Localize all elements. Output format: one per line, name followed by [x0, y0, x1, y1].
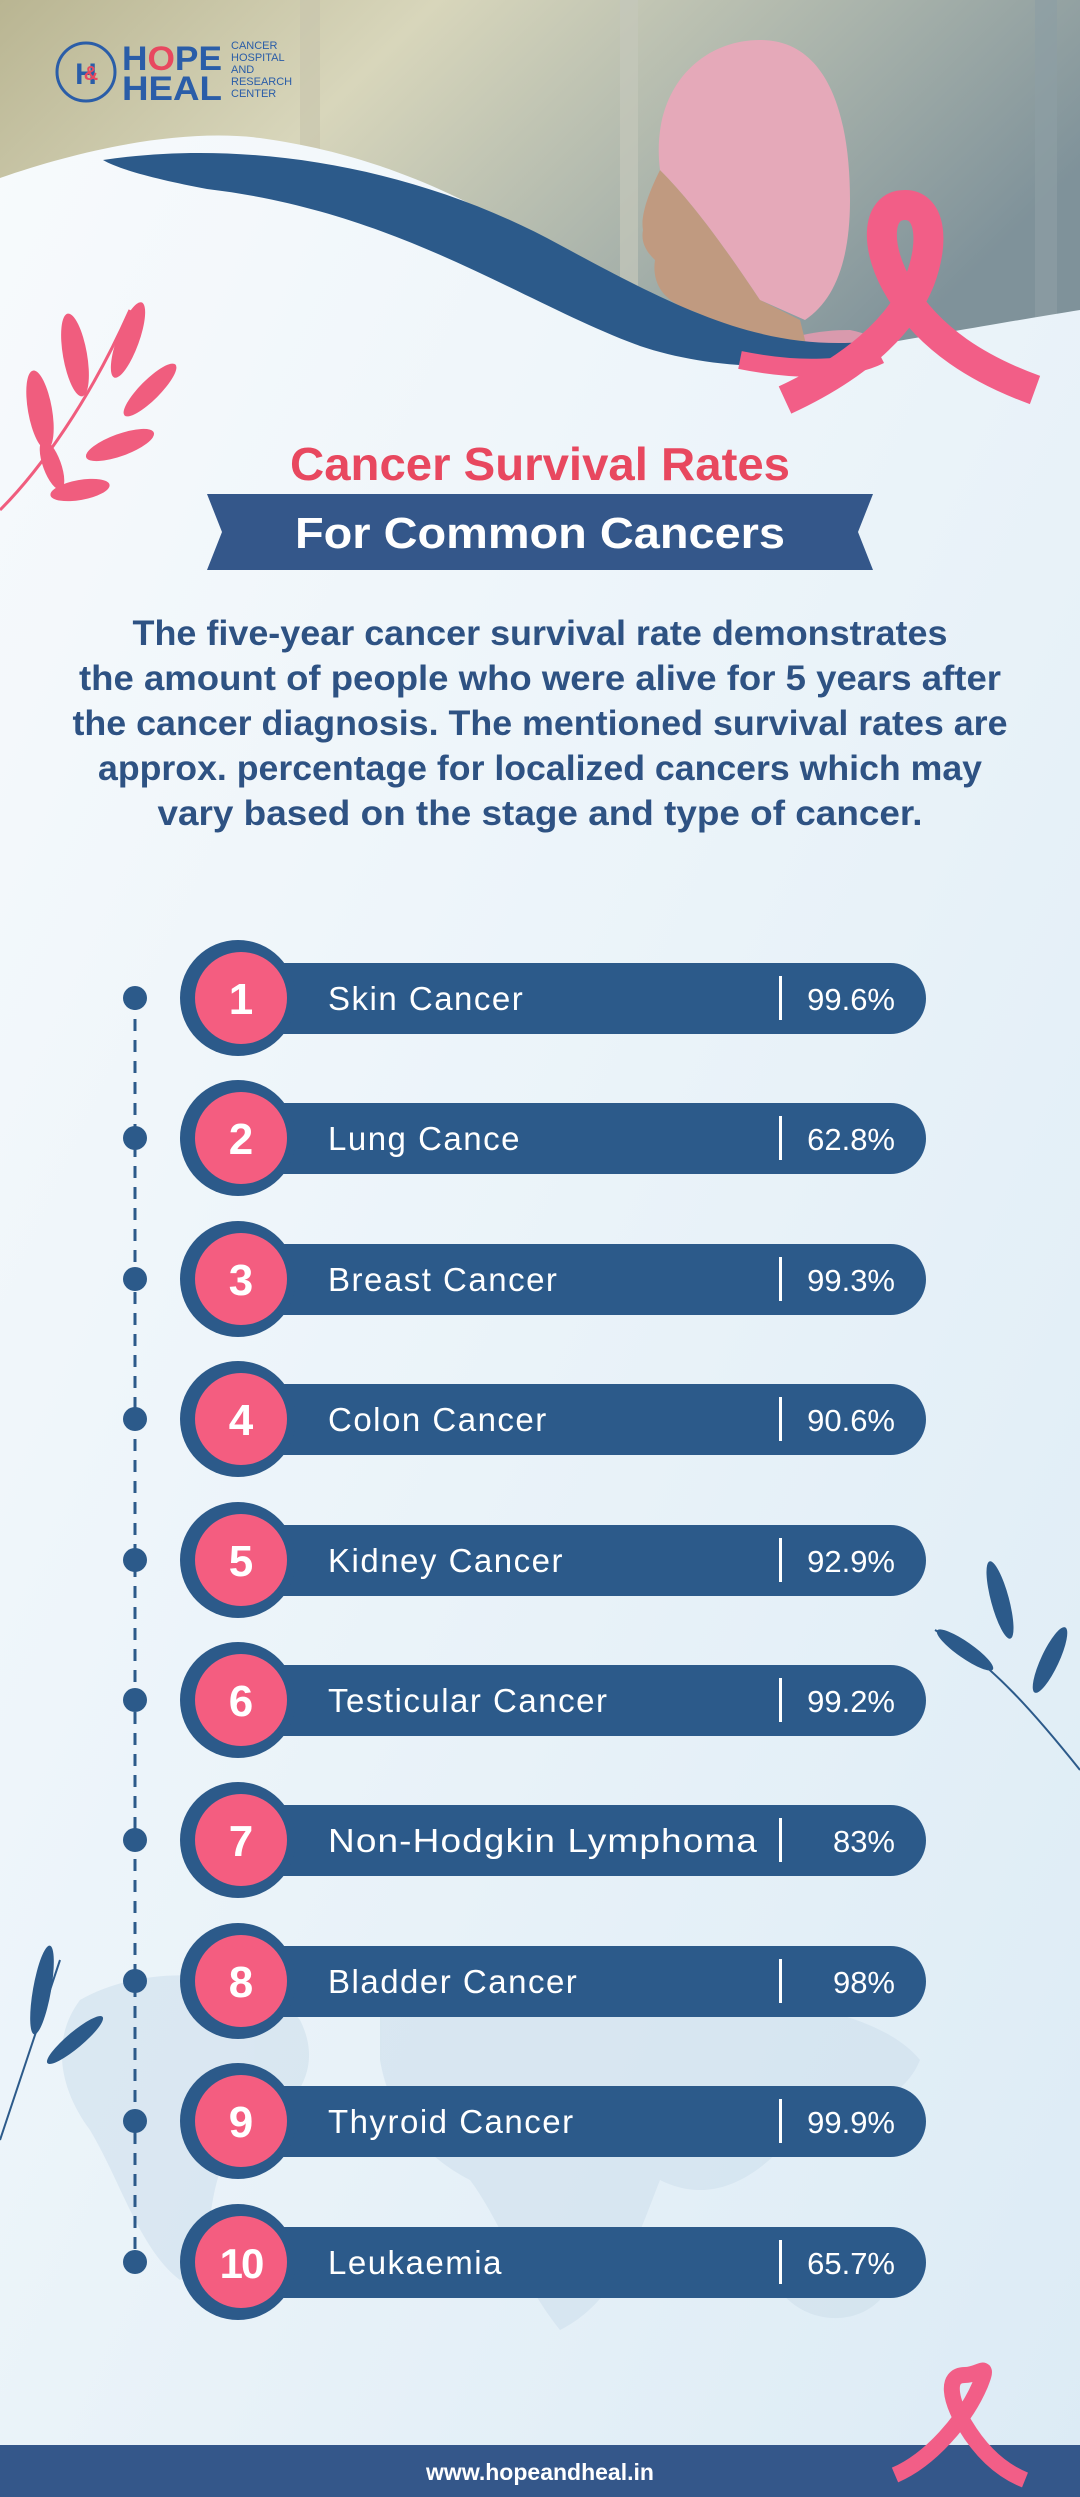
intro paragraph: the cancer diagnosis. The mentioned survival rates are	[72, 704, 1008, 743]
row 9: 9	[229, 2098, 253, 2147]
title banner	[207, 494, 873, 570]
row 3: 99.3%	[807, 1263, 895, 1298]
logo: CENTER	[231, 88, 276, 100]
row 2	[123, 1080, 926, 1196]
icon: blue leaves left	[0, 1944, 108, 2140]
logo: RESEARCH	[231, 76, 292, 88]
woman figure	[642, 40, 940, 420]
logo: HOSPITAL	[231, 52, 285, 64]
intro paragraph: the amount of people who were alive for 5 years after	[79, 659, 1001, 698]
icon: pink ribbon bottom	[895, 2371, 1025, 2480]
row 8: 98%	[833, 1965, 895, 2000]
row 8	[123, 1923, 926, 2039]
row 4: Colon Cancer	[328, 1401, 548, 1438]
blue wave band	[103, 153, 865, 366]
row 1: 99.6%	[807, 982, 895, 1017]
row 4: 90.6%	[807, 1403, 895, 1438]
row 1: 1	[229, 975, 253, 1024]
row 7: 83%	[833, 1824, 895, 1859]
row 6	[123, 1642, 926, 1758]
row 2: 62.8%	[807, 1122, 895, 1157]
intro paragraph: vary based on the stage and type of cancer.	[158, 794, 922, 833]
title: Cancer Survival Rates	[290, 438, 790, 490]
row 1: Skin Cancer	[328, 980, 524, 1017]
row 3: Breast Cancer	[328, 1261, 558, 1298]
intro paragraph: The five-year cancer survival rate demonstrates	[132, 614, 947, 653]
logo: CANCER	[231, 40, 278, 52]
logo: HOPE	[122, 40, 222, 78]
row 5	[123, 1502, 926, 1618]
header photo	[0, 0, 1080, 420]
row 4	[123, 1361, 926, 1477]
row 2: 2	[229, 1115, 253, 1164]
logo: AND	[231, 64, 254, 76]
icon: pink ribbon top	[740, 205, 1035, 400]
row 5: 92.9%	[807, 1544, 895, 1579]
logo: HEAL	[122, 70, 222, 108]
icon: pink leaf branch top-left	[0, 299, 183, 510]
row 4: 4	[229, 1396, 254, 1445]
logo: &	[84, 63, 98, 85]
footer bar	[0, 2445, 1080, 2497]
icon: blue leaves right	[933, 1559, 1080, 1770]
world map faint	[62, 1975, 920, 2330]
intro paragraph	[72, 614, 1008, 833]
row 3	[123, 1221, 926, 1337]
row 10	[123, 2204, 926, 2320]
row 7: Non-Hodgkin Lymphoma	[328, 1822, 758, 1859]
row 6: 6	[229, 1677, 253, 1726]
row 2: Lung Cance	[328, 1120, 521, 1157]
row 8: Bladder Cancer	[328, 1963, 578, 2000]
row 3: 3	[229, 1256, 253, 1305]
title banner: For Common Cancers	[295, 509, 785, 558]
row 6: 99.2%	[807, 1684, 895, 1719]
row 6: Testicular Cancer	[328, 1682, 608, 1719]
row 5: Kidney Cancer	[328, 1542, 564, 1579]
row 7	[123, 1782, 926, 1898]
row 7: 7	[229, 1817, 253, 1866]
logo: H	[75, 58, 97, 91]
row 10: Leukaemia	[328, 2244, 503, 2281]
row 5: 5	[229, 1537, 253, 1586]
row 1	[123, 940, 926, 1056]
logo	[57, 40, 292, 108]
row 10: 10	[220, 2240, 263, 2287]
row 9: Thyroid Cancer	[328, 2103, 575, 2140]
intro paragraph: approx. percentage for localized cancers which may	[98, 749, 983, 788]
footer bar: www.hopeandheal.in	[425, 2459, 654, 2485]
row 10: 65.7%	[807, 2246, 895, 2281]
row 8: 8	[229, 1958, 253, 2007]
timeline dashed line	[134, 998, 136, 2262]
row 9	[123, 2063, 926, 2179]
row 9: 99.9%	[807, 2105, 895, 2140]
list rows	[123, 940, 926, 2320]
